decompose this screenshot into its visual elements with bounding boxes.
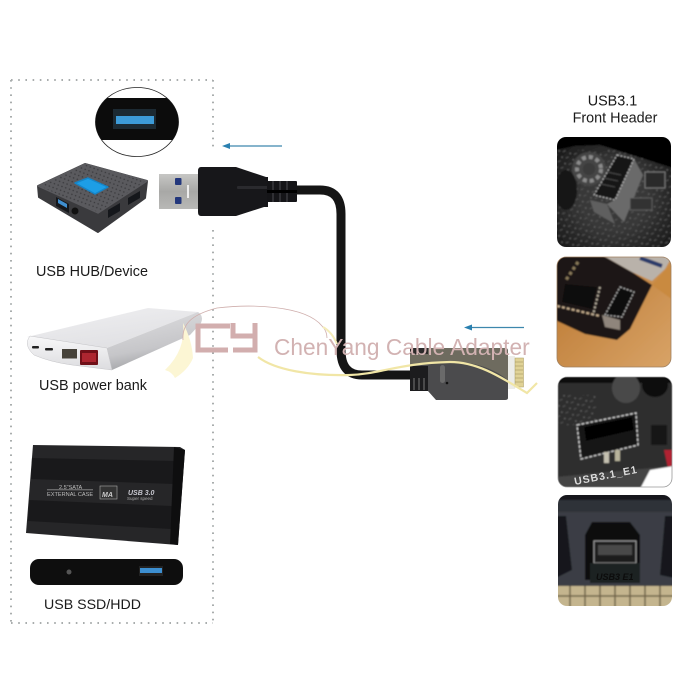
icon: USB-A plug (159, 167, 297, 216)
photo: header socket with dark shroud: USB3 E1 (596, 572, 634, 582)
label: USB power bank: USB power bank (39, 378, 148, 394)
cable (296, 190, 414, 375)
icon: front header connector (410, 348, 524, 400)
heading: USB3.1 Front Header (573, 94, 658, 126)
photo: header on board with orange backdrop (555, 255, 673, 369)
watermark: ChenYang swoosh and logo (165, 306, 537, 393)
label: USB HUB/Device: USB HUB/Device (36, 264, 148, 280)
icon: slim SSD drive (30, 559, 183, 585)
icon: hard drive enclosure: USB 3.0 (128, 490, 155, 497)
icon: USB hub (38, 164, 147, 232)
photo frame: board (557, 257, 671, 367)
icon: hard drive enclosure: 2.5"SATA (59, 485, 82, 491)
icon: hard drive enclosure: MA (102, 492, 113, 499)
photo: USB3.1_E1 header: USB3.1_E1 (573, 464, 639, 488)
icon: hard drive enclosure (26, 445, 185, 545)
heading: USB3.1 Front Header: USB3.1 (588, 94, 637, 110)
photo frame: USB3.1_E1 (558, 377, 672, 487)
heading: USB3.1 Front Header: Front Header (573, 110, 658, 126)
label: USB SSD/HDD: USB SSD/HDD (44, 597, 141, 613)
panel: dotted device frame (11, 80, 213, 623)
photo: USB3.1_E1 header (556, 373, 674, 489)
arrow: to device (222, 143, 282, 149)
icon: hard drive enclosure: Super speed (127, 496, 153, 501)
icon: hard drive enclosure: EXTERNAL CASE (47, 492, 93, 498)
arrow: to header (464, 324, 524, 330)
icon: power bank (27, 308, 202, 370)
photo: header socket with dark shroud (556, 493, 674, 608)
watermark: ChenYang swoosh and logo: ChenYang Cable Adapter (274, 334, 530, 360)
photo: grayscale header on motherboard (555, 135, 673, 249)
icon: USB port close-up (90, 88, 182, 156)
